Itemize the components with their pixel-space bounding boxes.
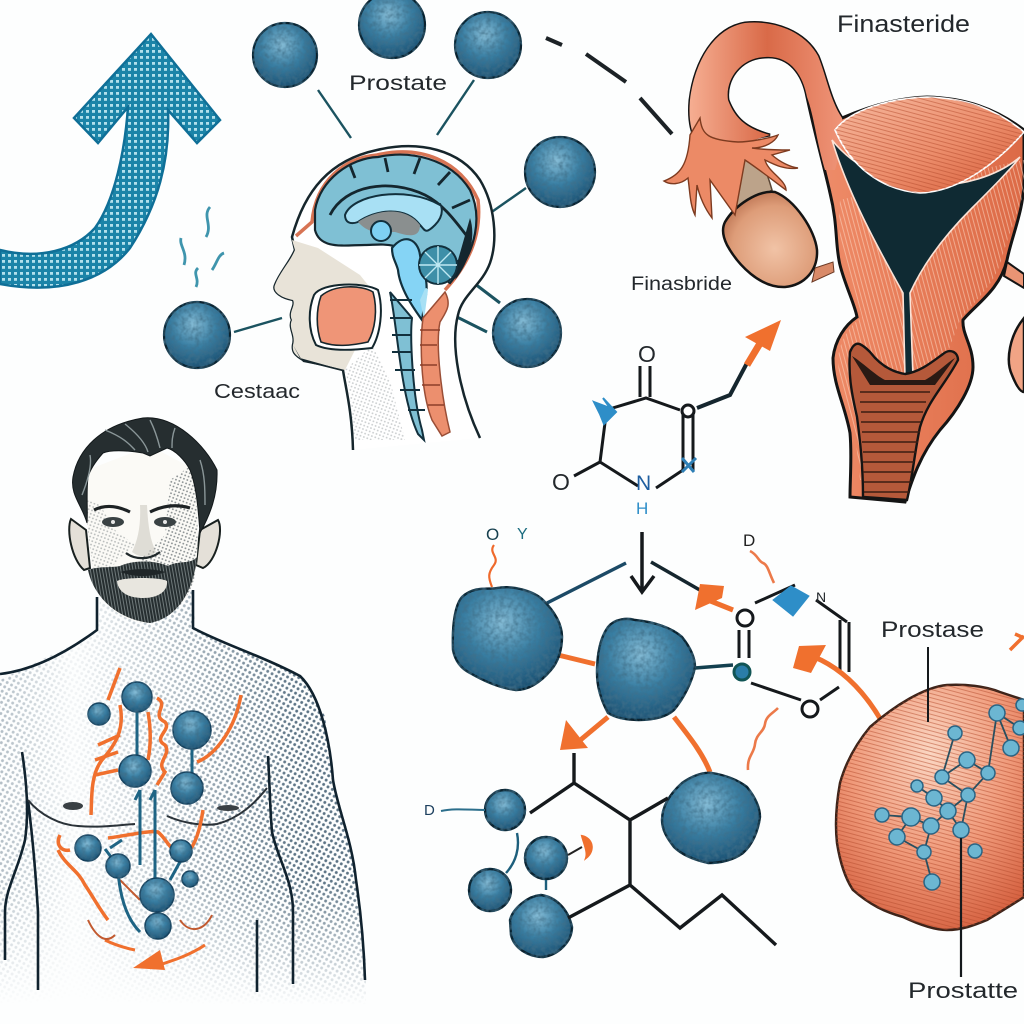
icon: small blue squiggles (181, 207, 224, 287)
cell spheres around head (164, 0, 595, 368)
connector lines (234, 80, 526, 332)
label: Prostase: Prostase (881, 617, 984, 642)
small labels with squiggles: Y (517, 526, 528, 543)
orange arrow fragment right edge (1010, 634, 1024, 650)
dashed arc arrow (546, 38, 672, 134)
face and head (69, 418, 220, 623)
molecule: top ring: N (636, 472, 651, 495)
label: Prostase (881, 617, 984, 722)
molecule: top ring (552, 341, 696, 518)
small labels with squiggles: D (743, 531, 755, 550)
down arrow (631, 532, 654, 592)
branched skeletal lines (506, 753, 776, 945)
small label D with lead and orange nub (424, 802, 592, 858)
head anatomy cross-section (274, 146, 494, 450)
body network (58, 668, 241, 970)
orange reaction arrows (558, 584, 896, 772)
man portrait and torso (0, 418, 366, 1005)
blue cell blobs (453, 587, 760, 957)
icon: large blue curved arrow (0, 34, 220, 288)
small label D with lead and orange nub: D (424, 802, 435, 819)
molecule: top ring: O (638, 341, 656, 367)
uterus anatomy organ (664, 23, 1024, 502)
prostate organ (836, 685, 1024, 930)
label: Finasbride: Finasbride (631, 274, 732, 295)
molecule: top ring: O (552, 469, 570, 495)
orange arrow to organ (697, 320, 781, 408)
label: Prostate: Prostate (349, 72, 447, 95)
small labels with squiggles: O (486, 525, 499, 544)
lower ring molecule and connectors (547, 562, 849, 717)
torso halftone shading (0, 590, 366, 1005)
small labels with squiggles (486, 525, 778, 770)
label: Cestaac: Cestaac (214, 381, 300, 403)
label: Prostatte: Prostatte (908, 978, 1018, 1003)
label: Finasteride top: Finasteride (837, 11, 970, 38)
lower ring molecule and connectors: N (816, 589, 826, 605)
molecule: top ring: H (636, 499, 648, 518)
